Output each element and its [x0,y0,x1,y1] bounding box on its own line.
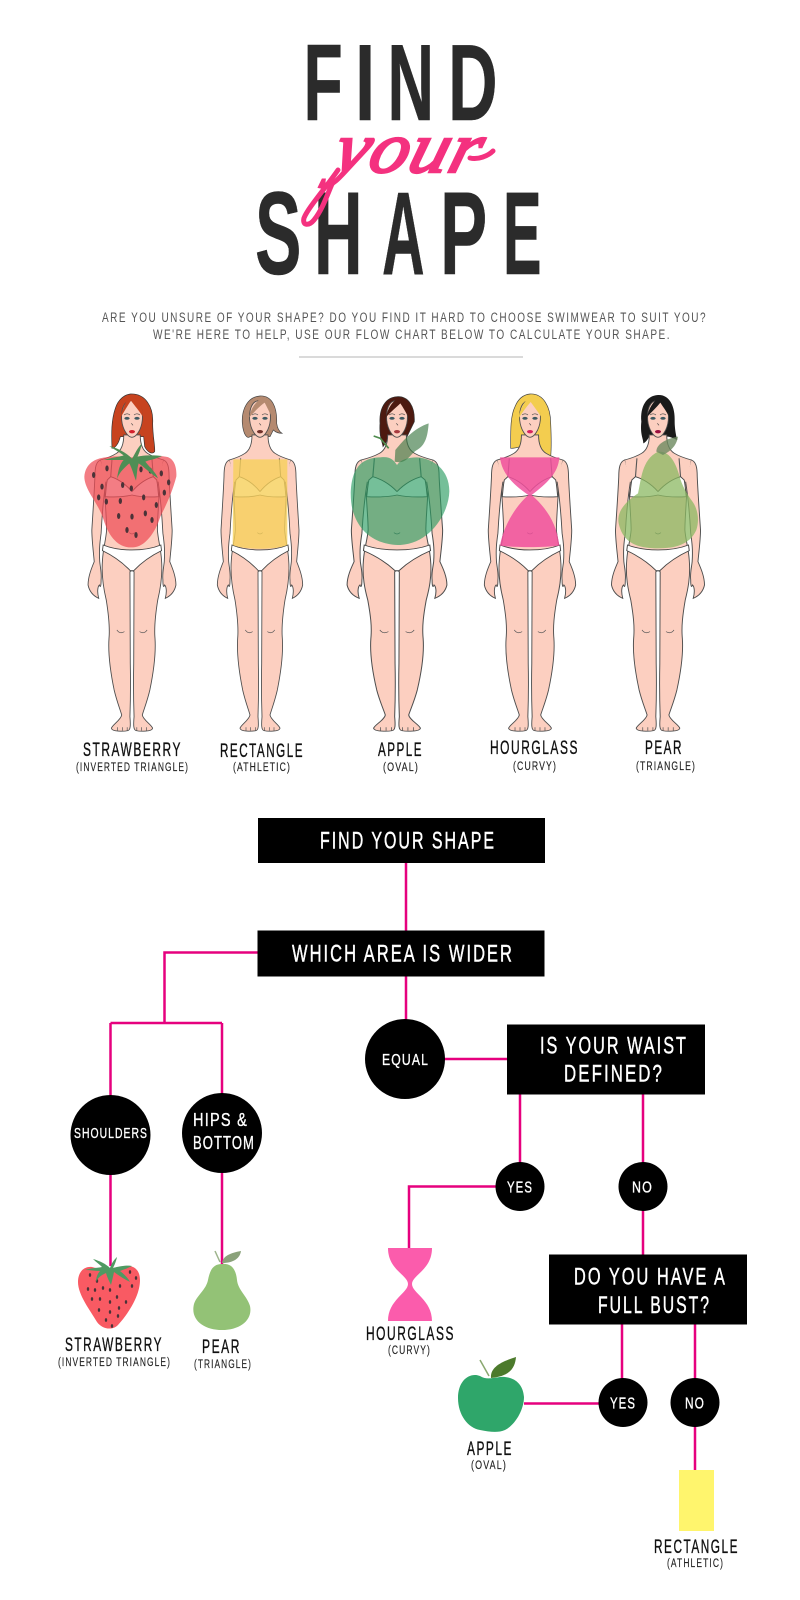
flowchart connectors [110,862,695,1472]
node: hips and bottom: BOTTOM [193,1133,255,1153]
label: pear: PEAR [645,737,683,759]
label: hourglass: HOURGLASS [490,737,579,759]
label: strawberry: STRAWBERRY [83,739,182,761]
box: do you have a full bust: FULL BUST? [598,1292,711,1319]
title word: SHAPE: P [440,167,487,299]
sublabel: inverted triangle flow: (INVERTED TRIANGLE) [58,1357,171,1369]
icon: rectangle [679,1470,714,1531]
title word: SHAPE: E [503,167,542,299]
title word: SHAPE: H [314,168,363,300]
title word: FIND: I [355,21,375,143]
node: waist no [618,1162,668,1211]
node: equal: EQUAL [382,1052,429,1069]
node: bust no [670,1378,720,1427]
title word: FIND: D [448,23,498,144]
label: pear flow: PEAR [202,1336,241,1358]
sublabel: athletic: (ATHLETIC) [233,762,291,774]
box: find your shape [258,818,545,863]
title word: FIND: F [304,21,343,143]
label: strawberry flow: STRAWBERRY [65,1334,163,1356]
intro text [102,310,707,342]
box: is your waist defined: IS YOUR WAIST [540,1032,688,1060]
node: waist no: NO [632,1180,653,1196]
title word: FIND: N [388,21,434,143]
icon: hourglass [388,1248,432,1321]
title [255,21,542,300]
figure: hourglass [484,394,576,731]
node: shoulders [70,1095,150,1175]
label: rectangle: RECTANGLE [220,740,304,762]
figure: strawberry [84,394,176,731]
title word: SHAPE: S [255,167,301,300]
figure: apple [347,397,449,731]
sublabel: triangle: (TRIANGLE) [636,761,696,773]
node: waist yes [496,1162,544,1211]
box: which area is wider [258,930,544,976]
sublabel: triangle flow: (TRIANGLE) [194,1359,252,1371]
label: apple flow: APPLE [467,1438,513,1460]
title word: SHAPE: A [382,168,425,299]
node: bust yes [598,1378,648,1427]
sublabel: oval: (OVAL) [383,762,419,774]
figure labels [76,737,696,774]
sublabel: athletic flow: (ATHLETIC) [667,1558,724,1570]
node: bust yes: YES [610,1396,636,1412]
node: equal [365,1019,445,1099]
box: which area is wider: WHICH AREA IS WIDER [292,940,514,968]
node: shoulders: SHOULDERS [74,1125,148,1142]
figure: rectangle [217,396,303,731]
label: rectangle flow: RECTANGLE [654,1536,739,1558]
sublabel: curvy flow: (CURVY) [388,1345,431,1357]
icon: apple [458,1357,524,1432]
title word: SHAPE [255,167,542,300]
box: find your shape: FIND YOUR SHAPE [320,828,496,854]
node: hips and bottom: HIPS & [193,1110,248,1130]
label: apple: APPLE [378,739,423,761]
box: do you have a full bust: DO YOU HAVE A [574,1264,727,1290]
sublabel: curvy: (CURVY) [513,761,557,773]
box: is your waist defined [507,1024,705,1094]
title word: your [304,108,495,224]
figure: pear [611,395,705,731]
icon: pear [193,1251,250,1330]
node: bust no: NO [685,1396,705,1412]
title word: FIND [304,21,498,144]
title word: your: your [318,108,495,188]
box: is your waist defined: DEFINED? [564,1060,664,1088]
icon: strawberry [78,1257,140,1329]
label: hourglass flow: HOURGLASS [366,1323,455,1345]
node: hips and bottom [182,1093,262,1173]
node: waist yes: YES [507,1180,533,1196]
sublabel: inverted triangle: (INVERTED TRIANGLE) [76,762,189,774]
box: do you have a full bust [549,1254,747,1324]
sublabel: oval flow: (OVAL) [471,1460,507,1472]
